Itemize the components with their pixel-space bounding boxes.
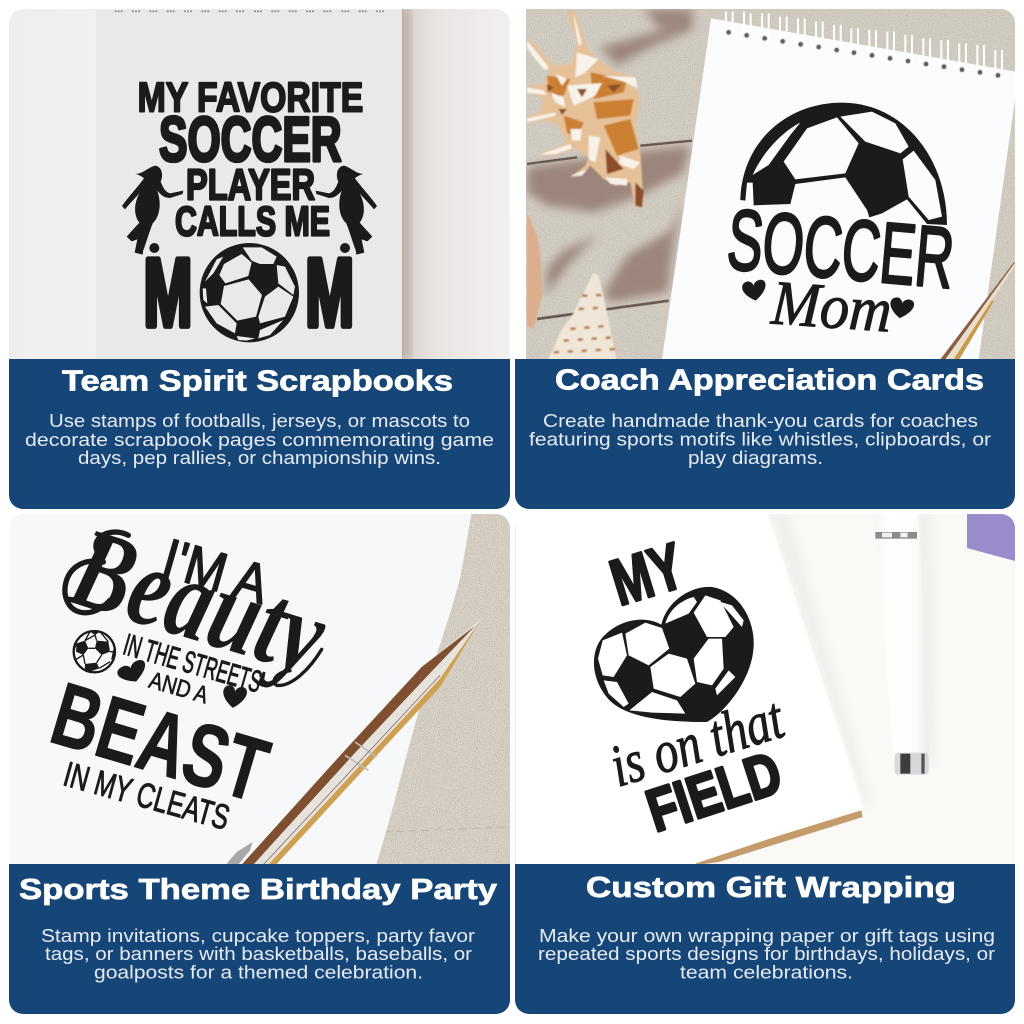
- icon: soccer ball: [200, 243, 299, 342]
- shell bottom: [547, 272, 617, 362]
- shell left edge: [527, 212, 542, 329]
- stamp: my favorite soccer player calls me mom: PLAYER: [186, 160, 315, 209]
- description text: goalposts for a themed celebration.: [94, 962, 423, 982]
- title: Custom Gift Wrapping: [586, 872, 956, 904]
- notebook page: [662, 18, 1016, 359]
- stamp: i'm a beauty in the streets and a beast in my cleats: Beauty: [56, 502, 341, 699]
- stamp: i'm a beauty in the streets and a beast in my cleats: I'M A: [156, 527, 276, 616]
- description text: days, pep rallies, or championship wins.: [78, 448, 441, 468]
- caption bar: [515, 864, 1015, 1014]
- gold pen: [227, 619, 482, 865]
- panel: custom gift wrapping: [512, 512, 1019, 1014]
- stamp: my favorite soccer player calls me mom: MY FAVORITE: [138, 73, 363, 120]
- title: Team Spirit Scrapbooks: [62, 366, 453, 398]
- description text: team celebrations.: [680, 962, 853, 982]
- photo: notebook on sand with shells and soccer mom stamp: [525, 7, 1019, 362]
- description text: repeated sports designs for birthdays, holidays, or: [538, 944, 995, 964]
- stamp: my favorite soccer player calls me mom: CALLS ME: [175, 199, 330, 245]
- caption bar: [515, 359, 1015, 509]
- caption bar: [9, 359, 510, 509]
- icon: right player silhouette: [316, 166, 377, 255]
- notebook page: [512, 512, 864, 865]
- sand background: [367, 512, 513, 865]
- description text: [538, 926, 995, 982]
- photo: paper on sand with gold pen and beauty beast stamp: [9, 502, 513, 865]
- stamp: my favorite soccer player calls me mom: M: [305, 240, 354, 346]
- caption bar: [9, 864, 510, 1014]
- stamp: my heart is on that field: FIELD: [639, 738, 789, 844]
- photo: notebook with favorite soccer player stamp: [9, 9, 510, 359]
- description text: decorate scrapbook pages commemorating game: [25, 430, 494, 450]
- panel: team spirit scrapbooks: [9, 9, 510, 509]
- purple sponge: [967, 514, 1015, 561]
- white pen: [874, 512, 935, 775]
- stamp: soccer mom: [724, 103, 958, 346]
- description text: Make your own wrapping paper or gift tags using: [539, 926, 995, 946]
- paper shadow: [775, 516, 848, 738]
- notebook rings: [114, 10, 384, 12]
- shell top: [527, 11, 644, 209]
- description text: [25, 411, 494, 468]
- stamp: my favorite soccer player calls me mom: [122, 73, 377, 346]
- panel: sports theme birthday party: [9, 502, 513, 1014]
- icon: left player silhouette: [122, 166, 183, 255]
- stamp: i'm a beauty in the streets and a beast in my cleats: IN MY CLEATS: [60, 755, 234, 838]
- icon: left heart: [742, 280, 766, 301]
- description text: tags, or banners with basketballs, baseballs, or: [45, 944, 472, 964]
- stamp: i'm a beauty in the streets and a beast in my cleats: IN THE STREETS: [120, 628, 265, 699]
- description text: featuring sports motifs like whistles, clipboards, or: [529, 430, 991, 450]
- description text: [41, 926, 475, 982]
- panel: coach appreciation cards: [515, 7, 1019, 509]
- stamp: my favorite soccer player calls me mom: M: [144, 240, 192, 346]
- stamp: i'm a beauty in the streets and a beast in my cleats: [50, 529, 326, 829]
- stamp: my heart is on that field: [594, 529, 792, 844]
- stamp: i'm a beauty in the streets and a beast in my cleats: BEAST: [41, 663, 279, 821]
- cardboard back: [695, 810, 863, 865]
- stamp: my favorite soccer player calls me mom: SOCCER: [159, 105, 342, 175]
- wood streaks: [527, 9, 695, 302]
- description text: Create handmade thank-you cards for coaches: [543, 411, 978, 431]
- description text: Stamp invitations, cupcake toppers, party favor: [41, 926, 475, 946]
- description text: [529, 411, 991, 468]
- stamp: my heart is on that field: is on that: [603, 684, 792, 799]
- icon: right heart: [890, 298, 914, 318]
- icon: half soccer ball: [740, 103, 947, 225]
- decorative swashes on beauty: [65, 532, 322, 685]
- stamp: my heart is on that field: MY: [602, 529, 692, 619]
- icon: soccer ball: [74, 631, 115, 672]
- icon: heart right: [223, 685, 247, 708]
- pen: [940, 262, 1014, 359]
- spiral binding: [726, 12, 1002, 78]
- title: Coach Appreciation Cards: [555, 364, 984, 396]
- photo: notebook with white pen and my heart is on that field stamp: [512, 512, 1019, 865]
- description text: Use stamps of footballs, jerseys, or mascots to: [49, 411, 470, 431]
- icon: heart shaped soccer ball: [594, 587, 754, 722]
- title: Sports Theme Birthday Party: [19, 874, 497, 906]
- description text: play diagrams.: [688, 448, 823, 468]
- stamp: soccer mom: Mom: [768, 267, 894, 346]
- stamp: i'm a beauty in the streets and a beast in my cleats: AND A: [146, 667, 211, 709]
- icon: heart left: [117, 660, 146, 682]
